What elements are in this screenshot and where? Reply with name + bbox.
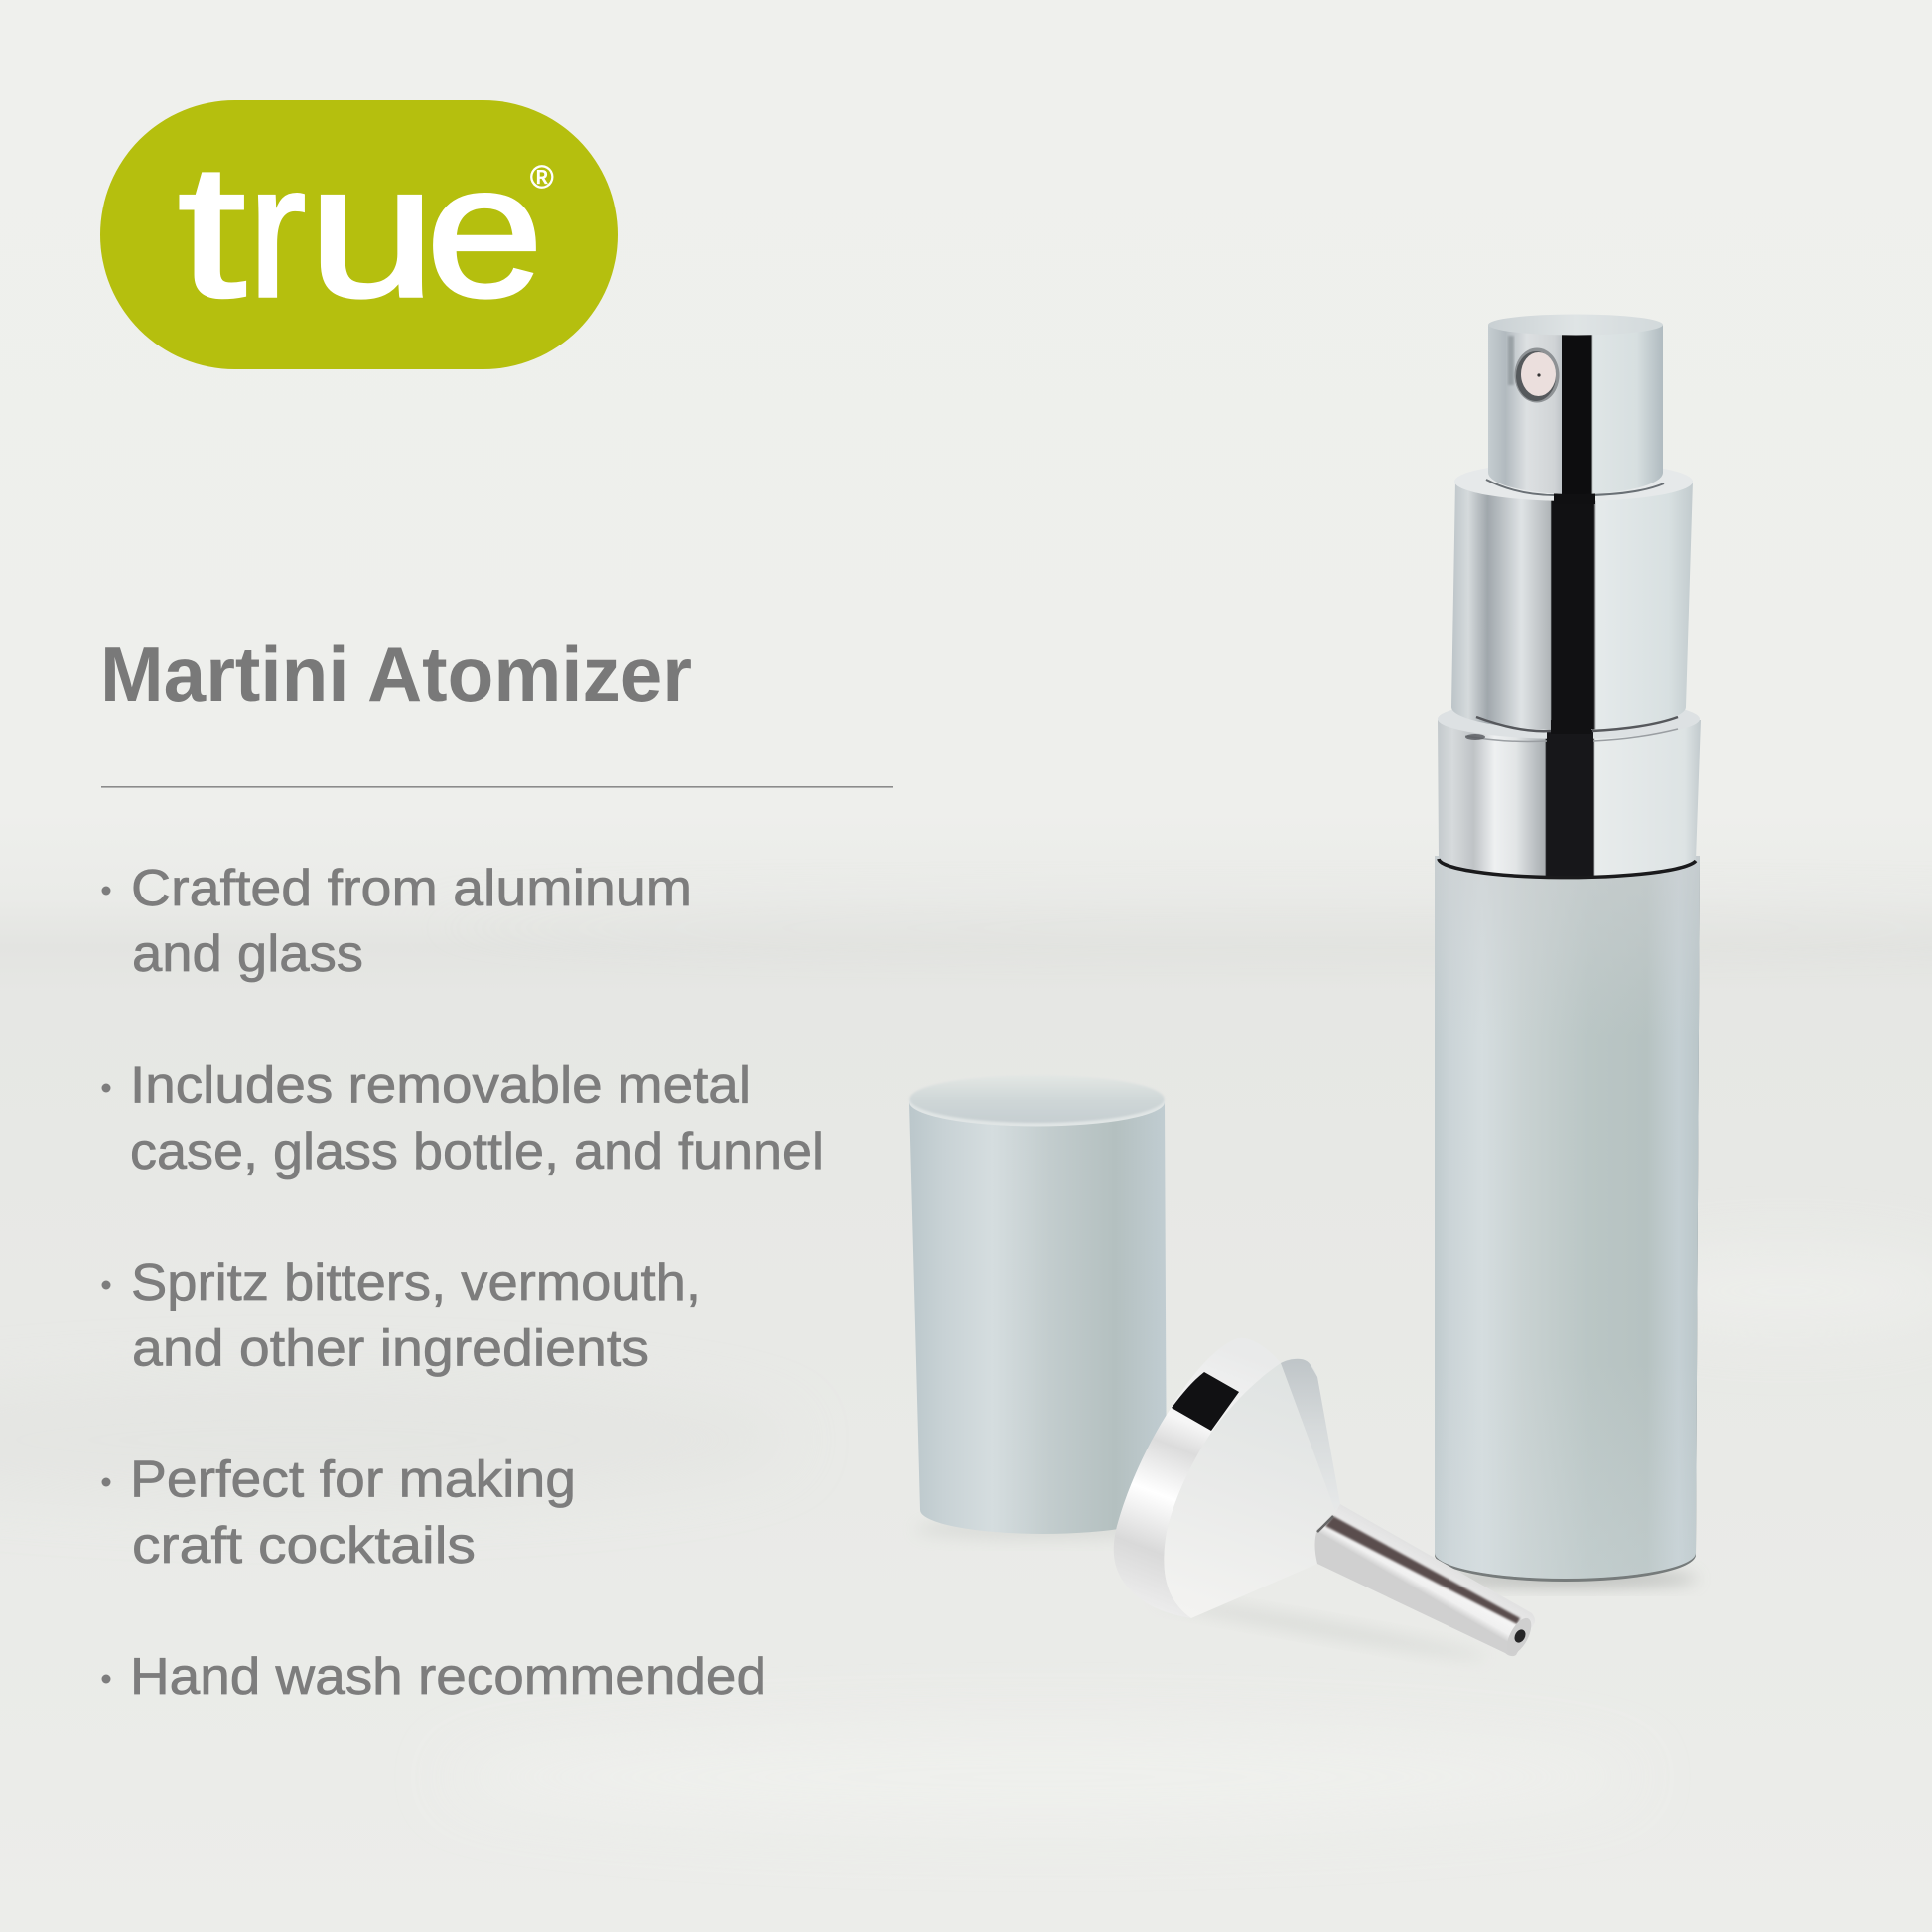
bullet: craft cocktails (101, 1451, 576, 1575)
logo: true brand pill (100, 100, 618, 369)
heading: product title: Martini Atomizer (100, 630, 692, 718)
product: atomizer bottle (1435, 314, 1701, 1587)
logo: true brand pill: ® (530, 159, 554, 195)
bullet: aluminum and glass: and glass (132, 925, 363, 983)
bullet: hand wash: Hand wash recommended (130, 1648, 766, 1706)
feature list (101, 860, 824, 1706)
funnel polished rim (1114, 1338, 1281, 1618)
bullet: craft cocktails: craft cocktails (132, 1517, 476, 1575)
product: removable metal cap (909, 1075, 1170, 1539)
bottle spray head (1488, 314, 1663, 494)
bullet: spritz (101, 1254, 701, 1378)
bullet: includes: case, glass bottle, and funnel (130, 1123, 824, 1180)
bottle matte body (1435, 856, 1700, 1582)
divider under title (101, 786, 893, 788)
bullet: aluminum and glass (101, 860, 692, 983)
bottle lower chrome collar (1438, 699, 1701, 878)
logo: true brand pill: t (177, 126, 245, 337)
spray nozzle (1515, 347, 1559, 403)
bullet: spritz: and other ingredients (132, 1320, 649, 1378)
bullet: craft cocktails: Perfect for making (130, 1451, 576, 1509)
logo: true brand pill: e (425, 126, 543, 337)
bullet: includes (101, 1057, 824, 1180)
funnel cone (1164, 1359, 1340, 1618)
bullet: includes: Includes removable metal (130, 1057, 751, 1115)
bottle middle chrome sleeve (1451, 462, 1693, 734)
funnel stem (1314, 1504, 1536, 1658)
logo: true brand pill: r (248, 126, 306, 337)
bullet: aluminum and glass: Crafted from aluminum (131, 860, 692, 917)
product: metal funnel (1114, 1338, 1536, 1665)
logo: true brand pill: u (308, 126, 436, 337)
bullet: spritz: Spritz bitters, vermouth, (131, 1254, 701, 1311)
